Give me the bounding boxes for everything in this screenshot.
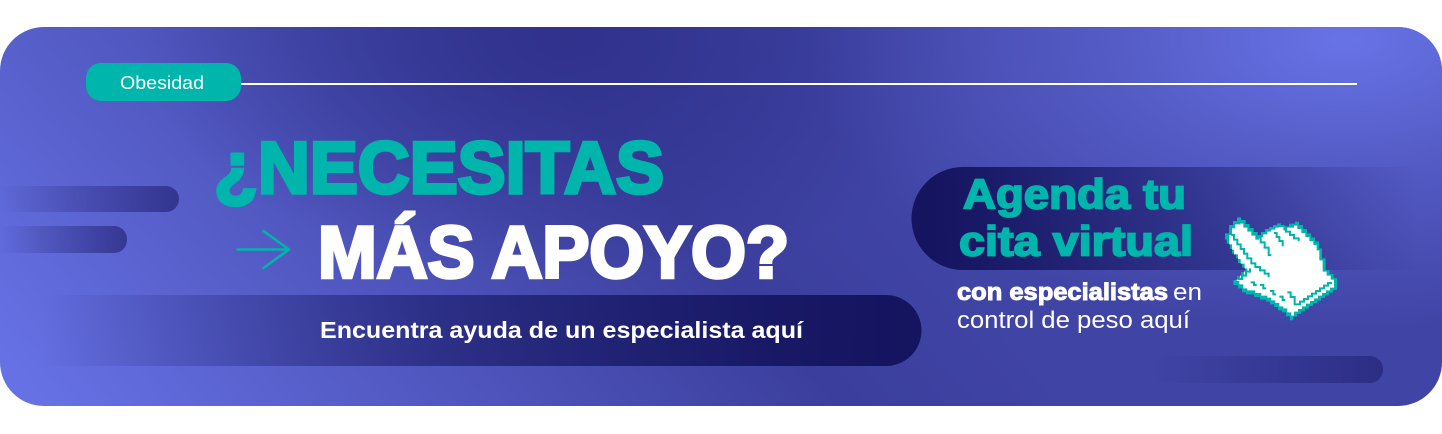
call to action heading: Agenda tu xyxy=(963,170,1186,218)
decorative bar: upper left xyxy=(20,186,179,212)
call to action text xyxy=(957,279,1202,334)
call to action heading: cita virtual xyxy=(959,218,1193,264)
icon: arrow xyxy=(238,231,289,268)
call to action text: control de peso aquí xyxy=(957,307,1190,334)
decorative bar: bottom right xyxy=(1150,356,1383,383)
header rule xyxy=(241,83,1357,85)
decorative bar: lower left xyxy=(14,226,127,253)
panel: subtitle band xyxy=(0,295,922,366)
panel: subtitle band: Encuentra ayuda de un especialista aquí xyxy=(320,317,805,343)
tag: Obesidad xyxy=(86,63,241,101)
heading: MÁS APOYO?: MÁS APOYO? xyxy=(318,212,789,294)
call to action text: en xyxy=(1173,279,1202,306)
panel: call to action band xyxy=(912,167,1442,270)
icon: pixel hand cursor xyxy=(1225,217,1337,320)
tag: Obesidad: Obesidad xyxy=(120,73,204,93)
call to action text: con especialistas xyxy=(957,279,1168,306)
heading: ¿NECESITAS: ¿NECESITAS xyxy=(214,128,664,209)
call to action heading xyxy=(959,170,1193,264)
